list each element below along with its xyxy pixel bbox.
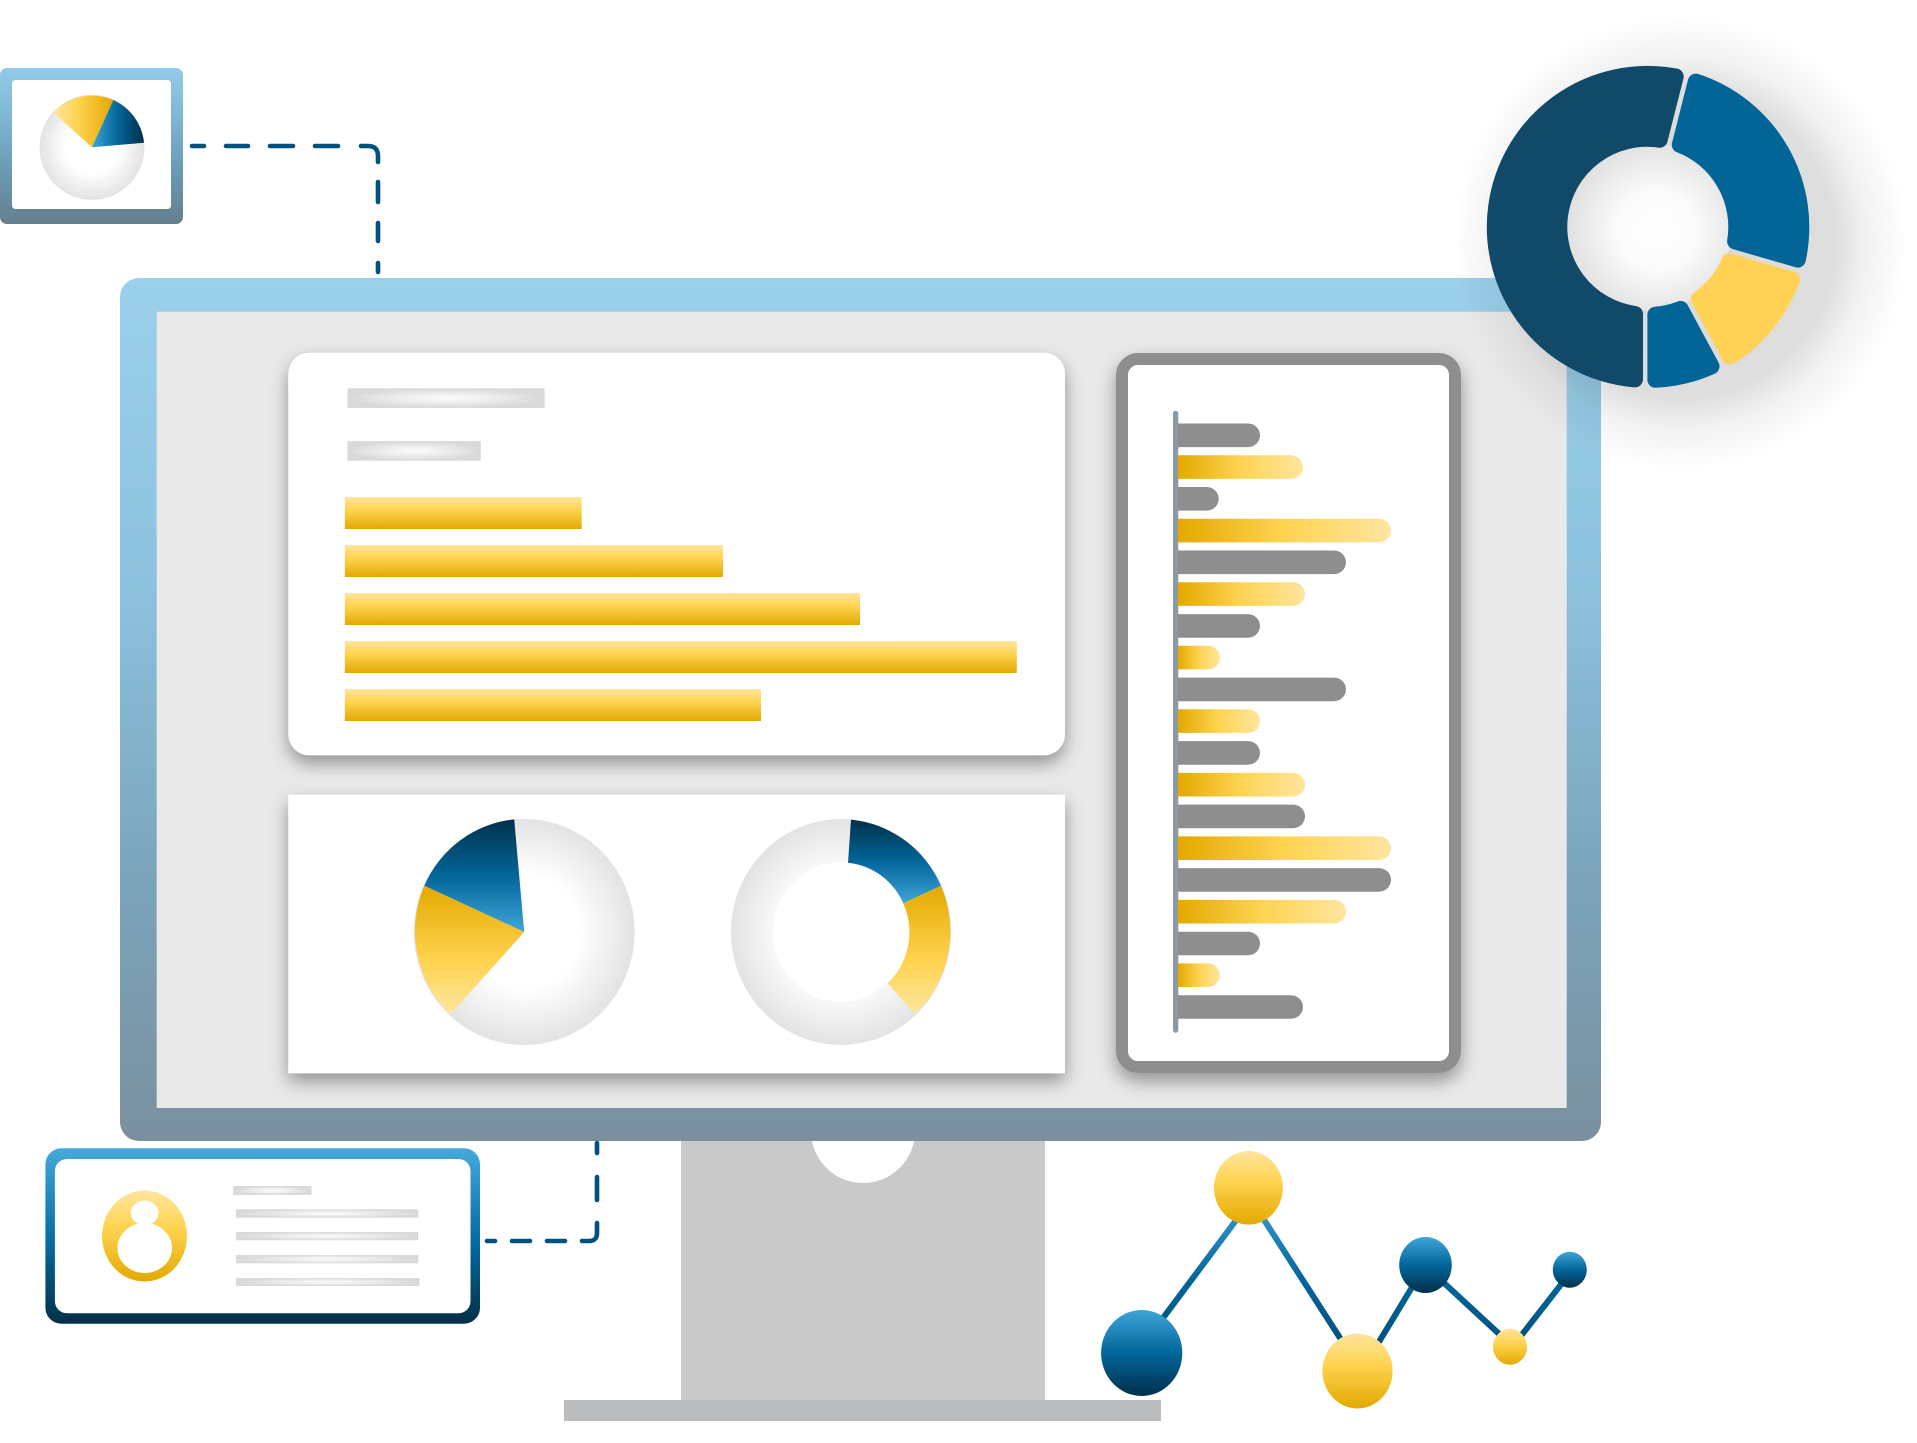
- card: small pie chart: [0, 68, 183, 224]
- segment: blue large: [1680, 82, 1801, 260]
- donut chart: [731, 819, 951, 1045]
- data points: [1101, 1151, 1587, 1408]
- segment: blue small: [1655, 309, 1712, 380]
- segment: yellow: [1699, 261, 1792, 356]
- segment: dark navy: [1495, 74, 1676, 379]
- panel: tall bar list: [1122, 359, 1455, 1067]
- placeholder title line 1: [347, 388, 545, 408]
- gray bars: [1178, 424, 1391, 1019]
- pie chart: [414, 819, 635, 1045]
- axis: [1173, 411, 1178, 1033]
- panel: pie and donut charts: [288, 795, 1065, 1073]
- monitor base: [564, 1400, 1161, 1421]
- dashed connector: top-left card to monitor: [192, 146, 378, 272]
- gold bars: [1178, 455, 1391, 987]
- panel: horizontal bar chart: [288, 353, 1065, 755]
- connecting line: [1150, 1198, 1570, 1365]
- dashed connector: profile card to monitor: [487, 1143, 597, 1241]
- donut soft shadow: [1452, 15, 1908, 471]
- placeholder title line 2: [347, 441, 481, 461]
- monitor stand: [681, 1079, 1045, 1400]
- monitor frame: [120, 278, 1601, 1141]
- gold horizontal bars: [345, 497, 1017, 721]
- card: profile: [45, 1148, 480, 1324]
- small pie: [40, 95, 144, 200]
- donut centre: [1564, 143, 1732, 311]
- icon: person avatar: [102, 1190, 187, 1282]
- large donut chart: [1452, 15, 1908, 471]
- placeholder text lines: [233, 1186, 420, 1286]
- line chart with bubbles: [1101, 1151, 1587, 1408]
